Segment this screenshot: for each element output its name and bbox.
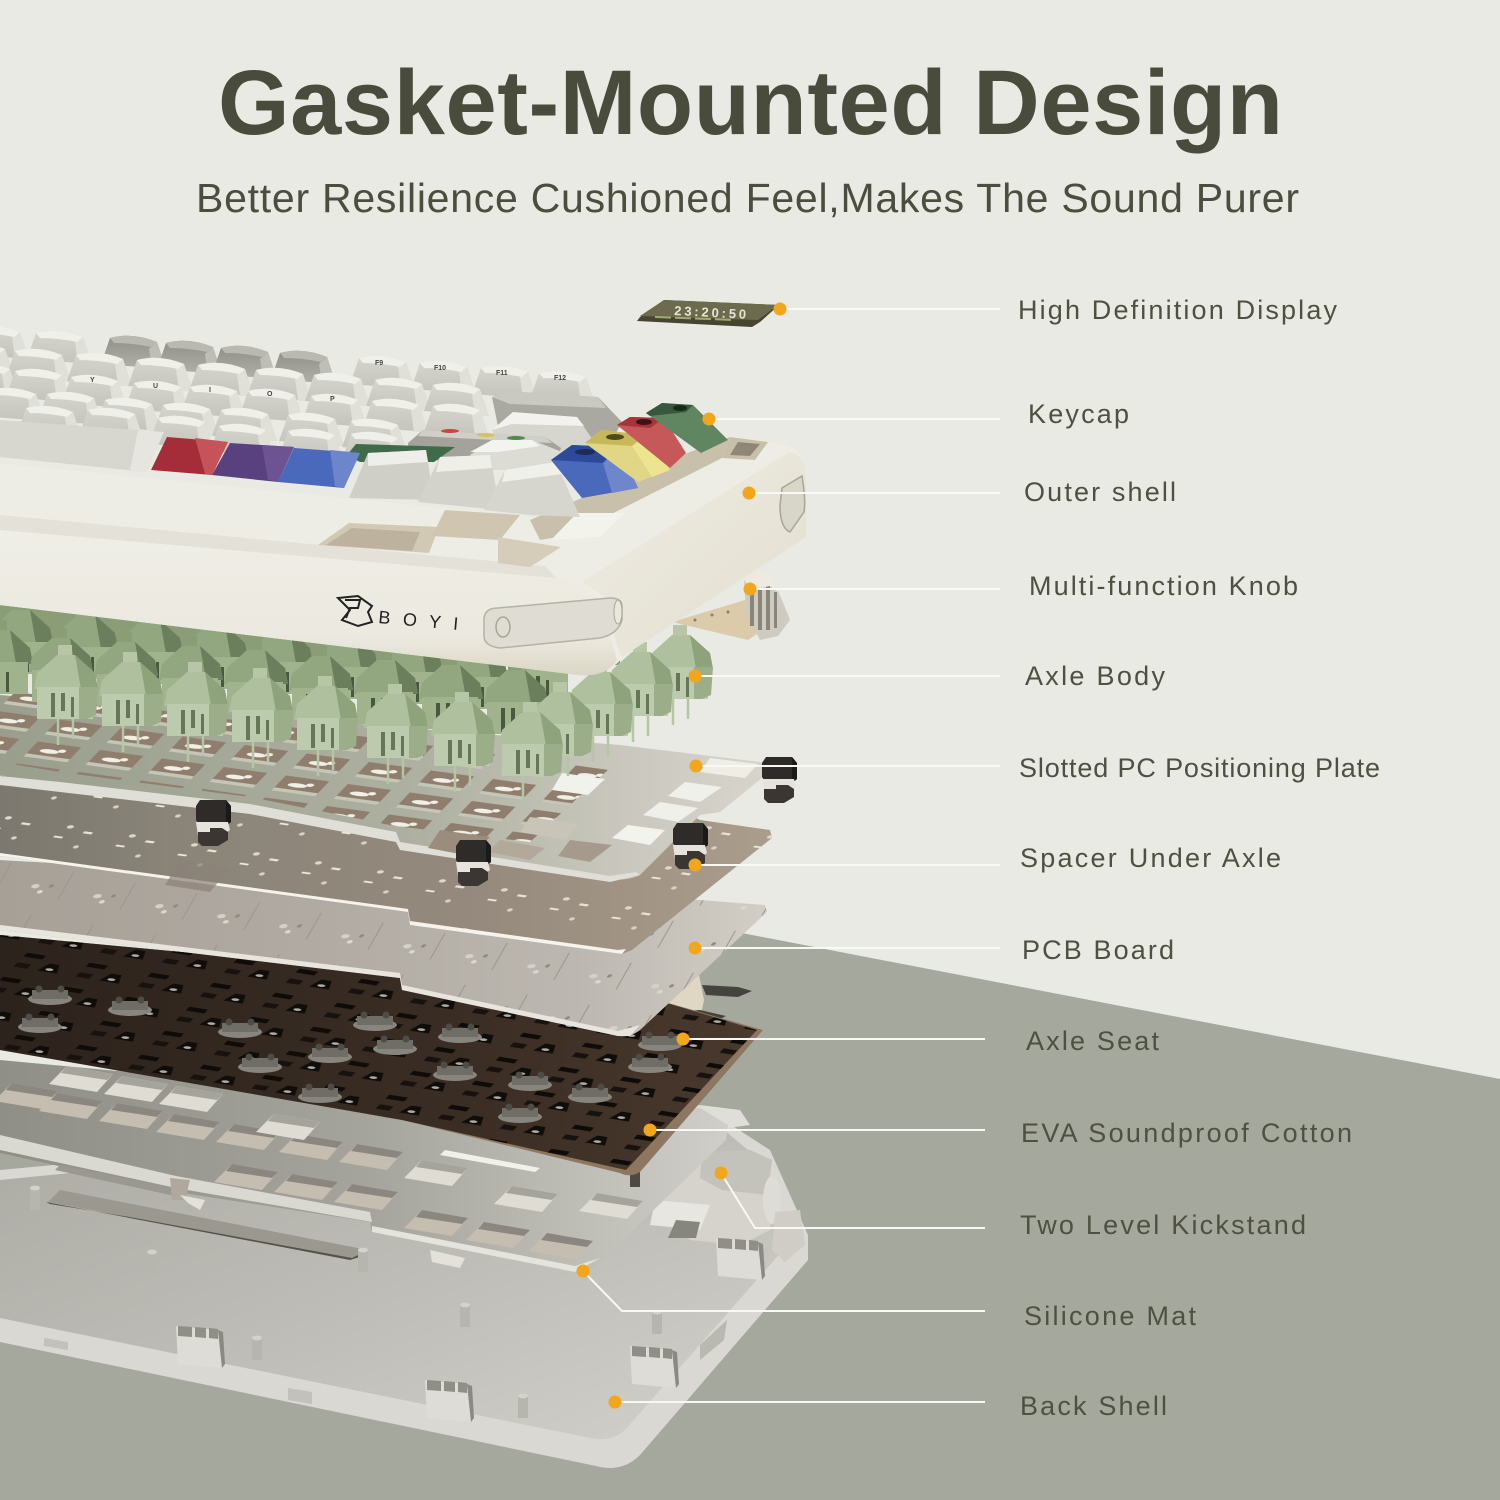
callout: Silicone Mat: Silicone Mat bbox=[1024, 1301, 1196, 1331]
red knob keycap bbox=[617, 417, 686, 468]
subtitle: Better Resilience Cushioned Feel,Makes The Sound Purer bbox=[196, 175, 1299, 221]
multi key bbox=[408, 429, 561, 462]
callout: Two Level Kickstand bbox=[714, 1166, 1306, 1240]
callout: PCB Board bbox=[688, 935, 1174, 965]
callout: Multi-function Knob bbox=[744, 571, 1298, 601]
callout: Outer shell: Outer shell bbox=[1024, 477, 1176, 507]
high definition display: 23:20:50 bbox=[674, 303, 747, 322]
BOYI logo: B O Y I bbox=[378, 607, 459, 634]
callout: Keycap: Keycap bbox=[1028, 399, 1129, 429]
callout: Multi-function Knob: Multi-function Knob bbox=[1029, 571, 1298, 601]
exploded keyboard illustration bbox=[0, 300, 808, 1468]
shell posts and clips bbox=[30, 1186, 765, 1422]
callout: PCB Board: PCB Board bbox=[1022, 935, 1174, 965]
slotted PC positioning plate bbox=[0, 690, 772, 882]
yellow knob keycap bbox=[585, 430, 670, 482]
loose axle seats bbox=[672, 985, 752, 1022]
down arrow key bbox=[418, 455, 500, 510]
PCB board bbox=[0, 860, 767, 1036]
green knob keycap bbox=[646, 403, 728, 453]
keycaps: F11 bbox=[496, 370, 508, 377]
green keycaps bbox=[347, 444, 455, 462]
callout: High Definition Display: High Definition Display bbox=[1018, 295, 1338, 325]
blue knob keycap bbox=[551, 445, 638, 498]
enter key bbox=[492, 413, 593, 456]
shell cutouts bbox=[318, 437, 768, 567]
front button bbox=[484, 598, 622, 648]
keycaps: F10 bbox=[434, 365, 446, 372]
keycaps: I bbox=[209, 387, 211, 394]
red keycap bbox=[151, 437, 228, 475]
knob bracket and multi-function knob bbox=[672, 573, 790, 640]
callout: Axle Body: Axle Body bbox=[1025, 661, 1166, 691]
callout: EVA Soundproof Cotton bbox=[644, 1118, 1352, 1148]
keycaps: F9 bbox=[375, 360, 383, 367]
BOYI logo bbox=[338, 596, 459, 634]
keycaps: U bbox=[153, 383, 158, 390]
callout: Outer shell bbox=[742, 477, 1176, 507]
beige rear glimpse bbox=[620, 970, 704, 1045]
callout: Spacer Under Axle: Spacer Under Axle bbox=[1020, 843, 1281, 873]
title: Gasket-Mounted Design bbox=[218, 52, 1283, 154]
plate right holes bbox=[428, 758, 758, 862]
spacebar bbox=[0, 420, 164, 472]
kickstand bbox=[640, 1105, 805, 1262]
spacer under axle bbox=[0, 770, 772, 954]
side button bbox=[780, 476, 805, 532]
high definition display bbox=[637, 300, 779, 327]
floor panel bbox=[0, 925, 1500, 1500]
backspace key bbox=[492, 392, 622, 440]
blue keycap bbox=[278, 448, 360, 488]
keycaps bbox=[0, 326, 728, 517]
right arrow key bbox=[484, 462, 580, 517]
callout: Axle Seat: Axle Seat bbox=[1026, 1026, 1159, 1056]
EVA soundproof cotton bbox=[0, 935, 763, 1175]
callout: Axle Body bbox=[688, 661, 1166, 691]
back shell bbox=[0, 1105, 808, 1468]
gaskets bbox=[196, 757, 797, 886]
silicone mat bbox=[0, 1060, 728, 1272]
keycaps: Y bbox=[90, 377, 95, 384]
left arrow key bbox=[349, 450, 434, 500]
callout: Slotted PC Positioning Plate bbox=[690, 753, 1380, 783]
front face bbox=[0, 530, 617, 675]
purple keycap bbox=[212, 443, 294, 482]
keycaps: P bbox=[330, 396, 335, 403]
keycaps: O bbox=[267, 391, 273, 398]
callout: Silicone Mat bbox=[576, 1264, 1196, 1331]
callout: Two Level Kickstand: Two Level Kickstand bbox=[1020, 1210, 1306, 1240]
callout: EVA Soundproof Cotton: EVA Soundproof Cotton bbox=[1021, 1118, 1352, 1148]
callout: High Definition Display bbox=[774, 295, 1338, 325]
up arrow key bbox=[470, 440, 562, 470]
callout: Spacer Under Axle bbox=[688, 843, 1281, 873]
callout: Back Shell bbox=[608, 1391, 1167, 1421]
keycaps: F12 bbox=[554, 375, 566, 382]
axle body switches bbox=[0, 600, 713, 802]
callout: Back Shell: Back Shell bbox=[1020, 1391, 1167, 1421]
axle seats bbox=[18, 986, 682, 1123]
callout: Slotted PC Positioning Plate: Slotted PC Positioning Plate bbox=[1019, 753, 1380, 783]
right face bbox=[582, 452, 806, 657]
outer shell bbox=[0, 436, 806, 675]
callout: Keycap bbox=[702, 399, 1129, 429]
callout: Axle Seat bbox=[676, 1026, 1159, 1056]
